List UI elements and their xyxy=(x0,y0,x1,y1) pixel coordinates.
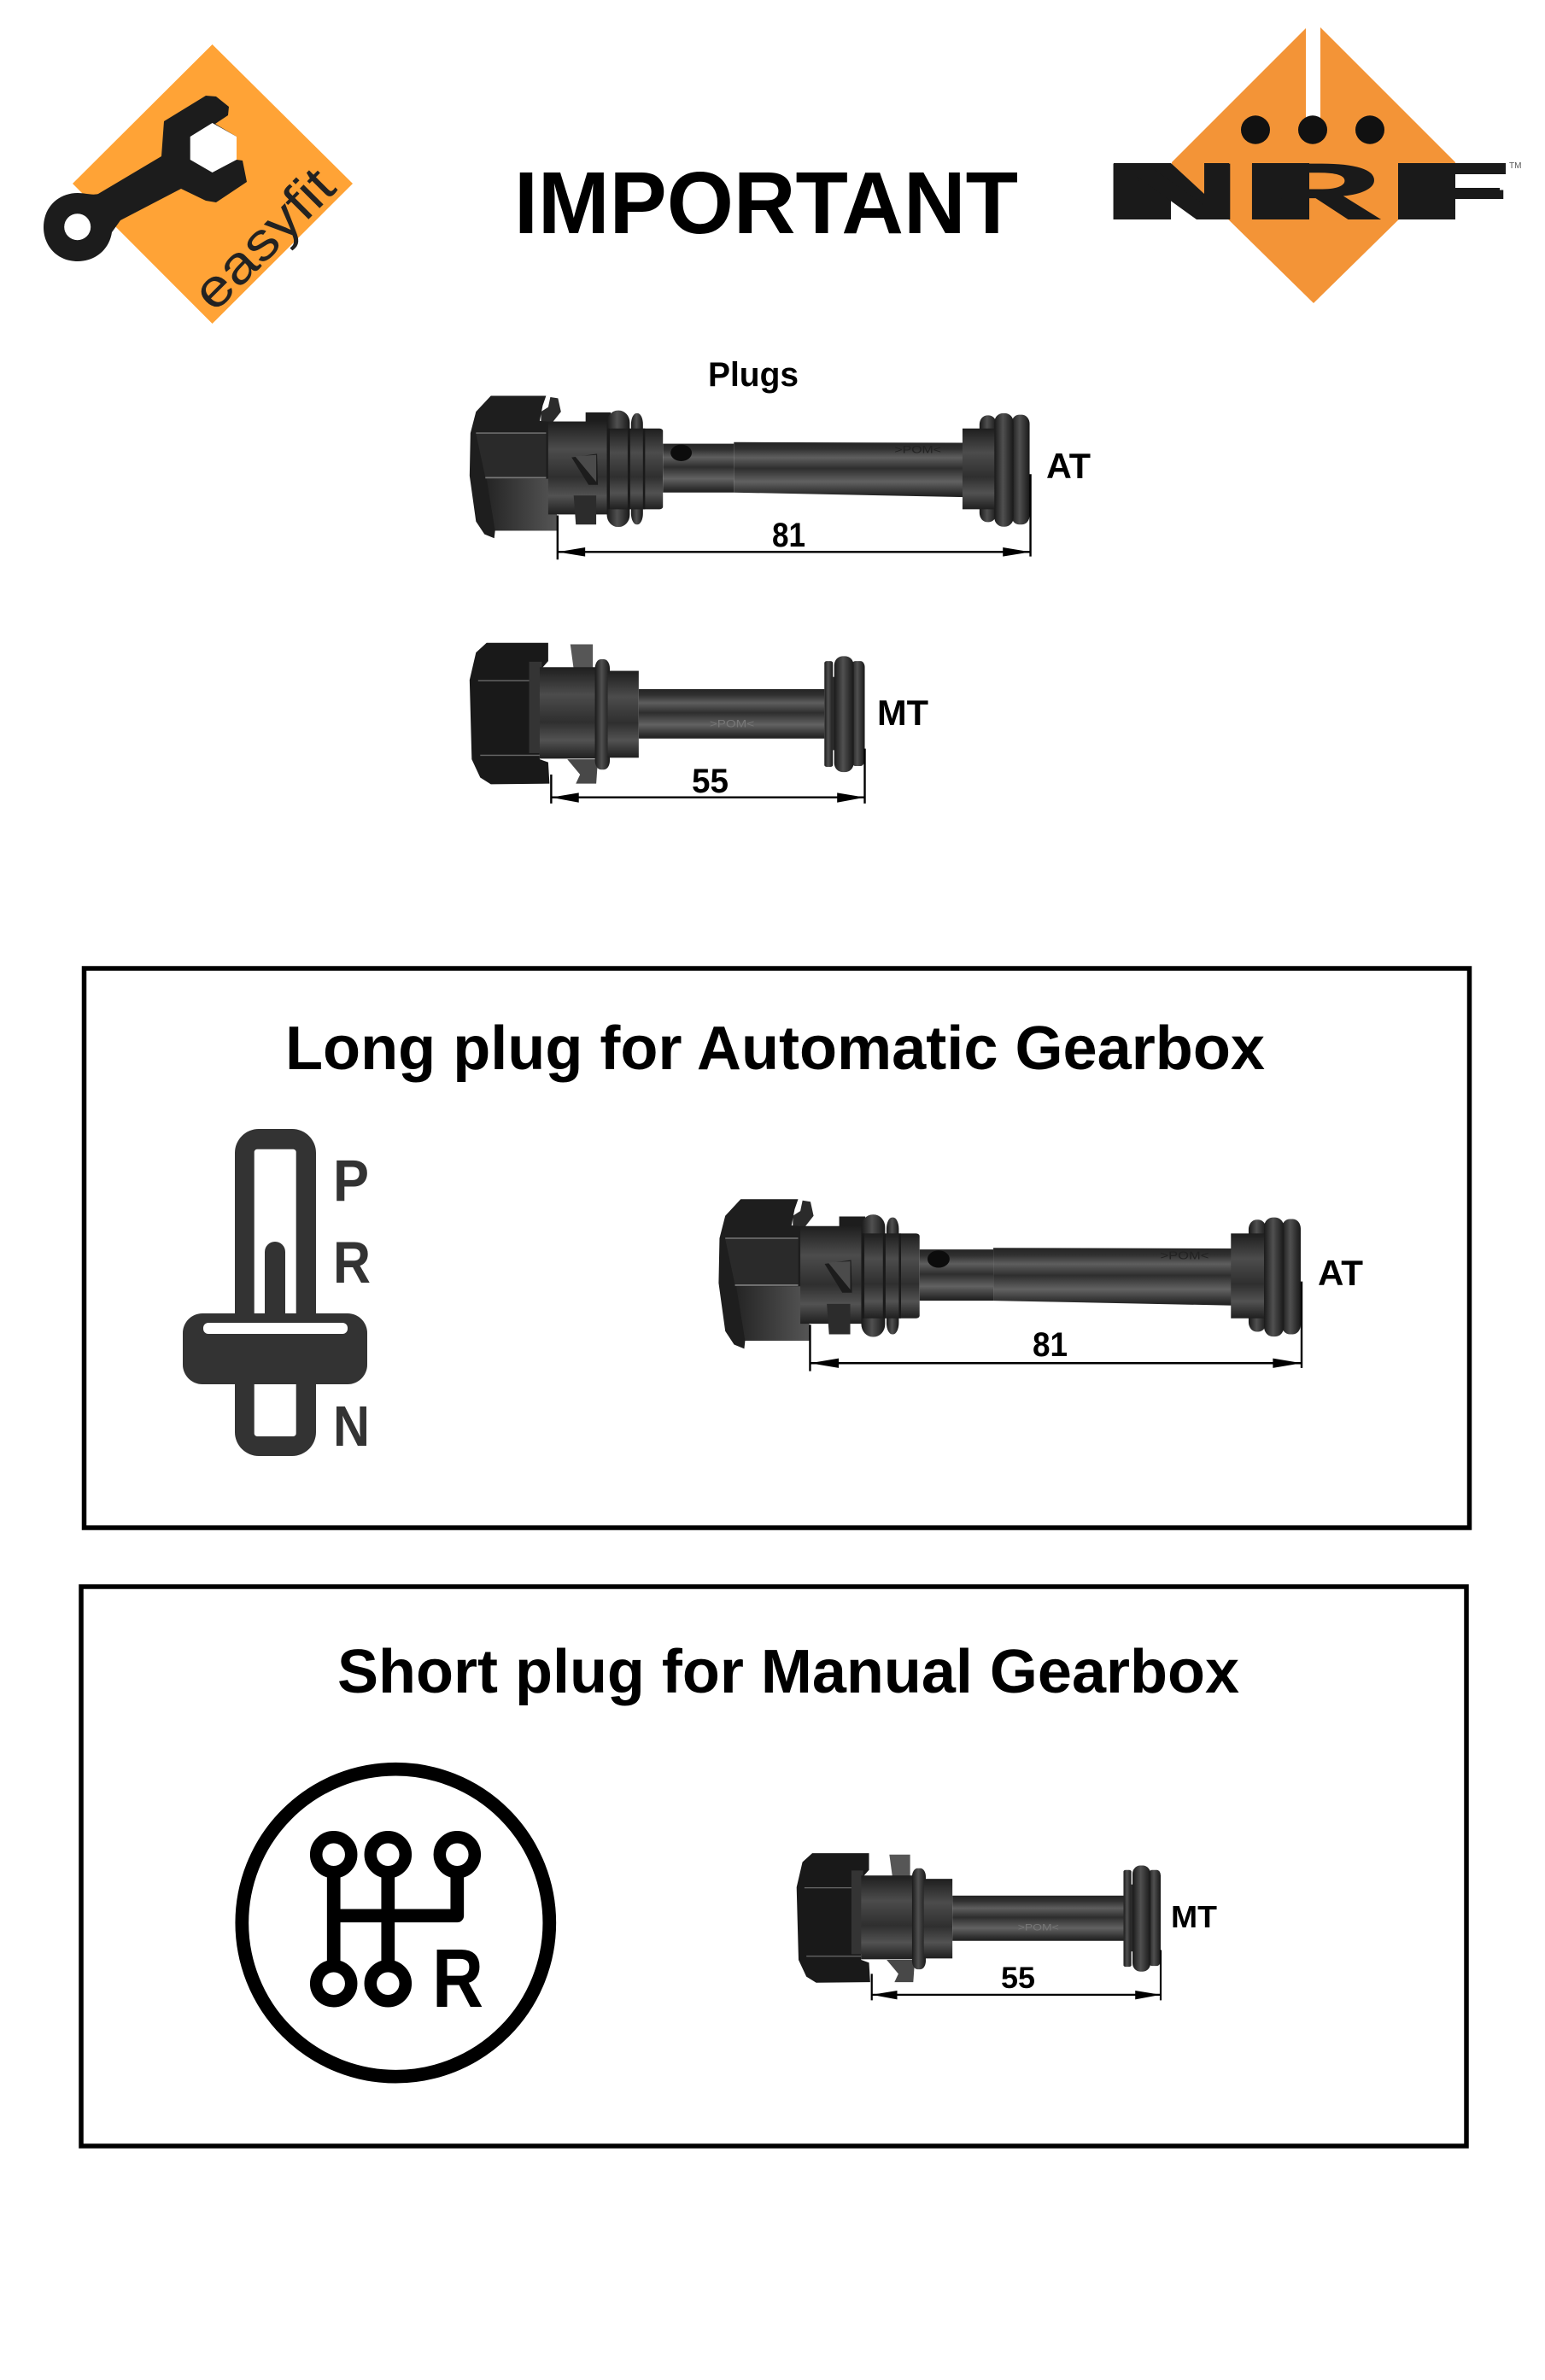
dimension value 55: 55 xyxy=(1001,1962,1035,1995)
long plug AT (panel): >POM< xyxy=(1161,1250,1208,1262)
icon: automatic gear selector: R xyxy=(333,1230,371,1295)
dimension value 55: 55 xyxy=(692,763,729,800)
icon: automatic gear selector xyxy=(183,1129,371,1459)
dimension arrow 81 xyxy=(810,1282,1302,1371)
easyfit orange diamond xyxy=(73,44,353,324)
long plug AT (panel) xyxy=(718,1199,1363,1371)
NRF white slot xyxy=(1306,13,1320,121)
long plug AT (top): >POM< xyxy=(894,444,941,456)
dimension arrow 55 xyxy=(872,1950,1161,2000)
NRF wordmark: TM xyxy=(1509,161,1521,171)
dimension value 81: 81 xyxy=(1033,1326,1068,1364)
icon: automatic gear selector: P xyxy=(333,1148,369,1213)
panel: automatic gearbox xyxy=(84,968,1469,1528)
easyfit wordmark: easyfit xyxy=(181,156,347,322)
panel heading: Long plug for Automatic Gearbox xyxy=(285,1015,1265,1083)
icon: wrench xyxy=(44,96,247,261)
panel frame xyxy=(81,1587,1466,2146)
label AT: AT xyxy=(1046,446,1091,486)
short plug MT (top): >POM< xyxy=(710,719,754,730)
NRF wordmark: N xyxy=(1100,147,1244,237)
icon: manual gear pattern xyxy=(242,1769,549,2077)
icon: hex nut xyxy=(190,123,237,173)
dimension value 81: 81 xyxy=(772,517,805,554)
NRF orange diamond xyxy=(1172,20,1455,303)
long plug AT (top) xyxy=(470,396,1091,559)
label AT: AT xyxy=(1318,1253,1363,1293)
NRF wordmark: F xyxy=(1385,147,1513,237)
label MT: MT xyxy=(877,693,928,733)
wrench ring hole xyxy=(64,213,91,240)
label MT: MT xyxy=(1171,1899,1217,1934)
panel heading: Short plug for Manual Gearbox xyxy=(337,1638,1239,1706)
NRF wordmark xyxy=(1100,147,1521,237)
NRF wordmark: R xyxy=(1238,147,1385,237)
panel: manual gearbox xyxy=(81,1587,1466,2146)
short plug MT (panel): >POM< xyxy=(1018,1922,1059,1933)
short plug MT (panel) xyxy=(797,1853,1217,2000)
icon: automatic gear selector: N xyxy=(333,1395,370,1459)
title: IMPORTANT xyxy=(514,154,1018,252)
NRF three dots xyxy=(1241,115,1384,144)
panel frame xyxy=(84,968,1469,1528)
dimension arrow 81 xyxy=(558,474,1031,559)
icon: manual gear pattern: R xyxy=(432,1932,483,2025)
logo: NRF xyxy=(1100,13,1521,303)
short plug MT (top) xyxy=(470,643,928,804)
dimension arrow 55 xyxy=(551,749,865,804)
logo: easyfit xyxy=(44,44,353,324)
heading: plugs: Plugs xyxy=(708,356,799,394)
